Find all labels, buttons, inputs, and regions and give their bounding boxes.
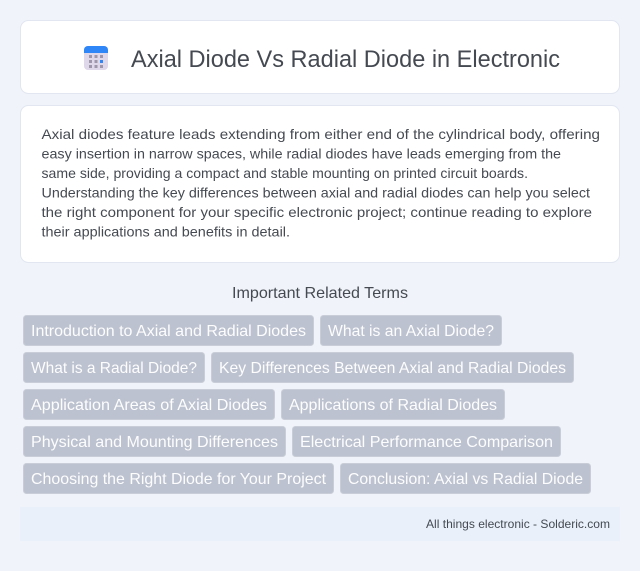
tag: Choosing the Right Diode for Your Project <box>31 471 327 488</box>
icon: calendar <box>84 46 108 70</box>
tag <box>292 426 560 456</box>
tag <box>340 464 590 494</box>
text block: description <box>42 126 600 240</box>
text block: description: the right component for your specific electronic project; continue reading to explore <box>42 204 592 220</box>
header panel <box>20 20 620 94</box>
tag group: related terms <box>24 316 590 494</box>
tag: Application Areas of Axial Diodes <box>31 397 267 414</box>
heading: related terms: Important Related Terms <box>232 285 408 302</box>
tag: Conclusion: Axial vs Radial Diode <box>348 471 583 488</box>
text block: description: Axial diodes feature leads extending from either end of the cylindrical body, offering <box>42 126 600 142</box>
tag <box>24 352 204 382</box>
tag: Introduction to Axial and Radial Diodes <box>31 323 306 340</box>
tag: Key Differences Between Axial and Radial Diodes <box>219 360 566 377</box>
tag: Applications of Radial Diodes <box>289 397 497 414</box>
tag <box>24 390 274 420</box>
tag: What is a Radial Diode? <box>31 360 197 377</box>
footer credit: All things electronic - Solderic.com <box>426 517 610 531</box>
tag: Physical and Mounting Differences <box>31 434 278 451</box>
tag <box>282 390 504 420</box>
tag: What is an Axial Diode? <box>328 323 494 340</box>
tag <box>24 464 334 494</box>
tag: Electrical Performance Comparison <box>300 434 553 451</box>
tag <box>212 352 574 382</box>
title: Axial Diode Vs Radial Diode in Electronic <box>131 46 560 73</box>
tag <box>24 426 286 456</box>
text block: description: same side, providing a compact and stable mounting on printed circuit boards. <box>42 165 528 181</box>
tag <box>320 316 502 346</box>
panel: description <box>20 106 620 262</box>
footer <box>20 507 620 541</box>
tag <box>24 316 314 346</box>
text block: description: Understanding the key differences between axial and radial diodes can help you select <box>42 184 590 200</box>
text block: description: their applications and benefits in detail. <box>42 224 290 240</box>
text block: description: easy insertion in narrow spaces, while radial diodes have leads emerging from the <box>42 146 561 162</box>
